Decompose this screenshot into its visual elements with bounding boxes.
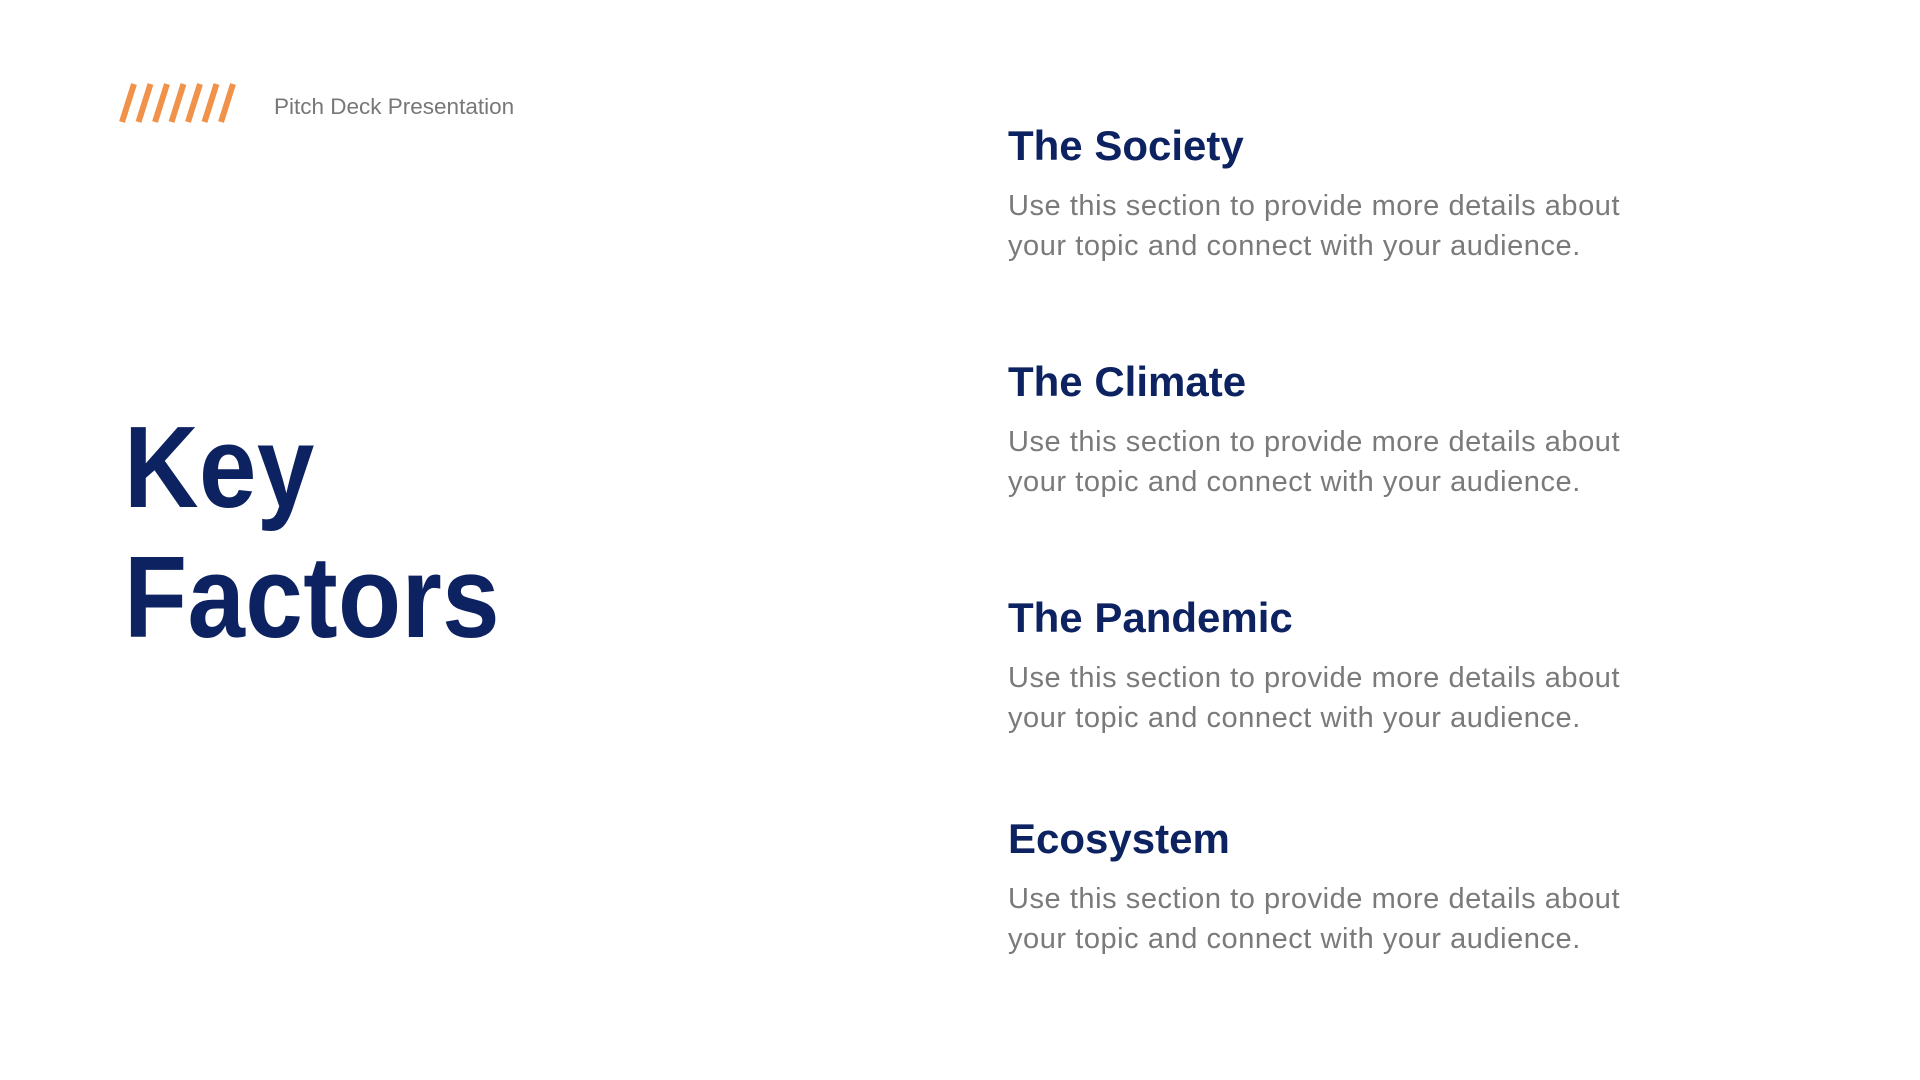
header label: Pitch Deck Presentation [274,94,514,119]
body text: your topic and connect with your audience. [1008,923,1581,955]
body text: your topic and connect with your audience. [1008,230,1581,262]
heading: The Climate [1008,358,1246,405]
title [124,402,500,662]
body text: your topic and connect with your audience. [1008,702,1581,734]
heading: The Society [1008,122,1244,169]
body text: Use this section to provide more details about [1008,190,1620,222]
body text [1008,662,1620,734]
body text: your topic and connect with your audience. [1008,466,1581,498]
body text: Use this section to provide more details about [1008,662,1620,694]
heading: Ecosystem [1008,815,1230,862]
section: The Pandemic [1008,594,1620,734]
body text [1008,883,1620,955]
body text: Use this section to provide more details about [1008,426,1620,458]
title: Factors [124,532,500,662]
body text: Use this section to provide more details about [1008,883,1620,915]
body text [1008,426,1620,498]
title: Key [124,402,315,532]
body text [1008,190,1620,262]
section: The Climate [1008,358,1620,498]
section: The Society [1008,122,1620,262]
logo: orange stripes [119,83,236,123]
heading: The Pandemic [1008,594,1293,641]
section: Ecosystem [1008,815,1620,955]
